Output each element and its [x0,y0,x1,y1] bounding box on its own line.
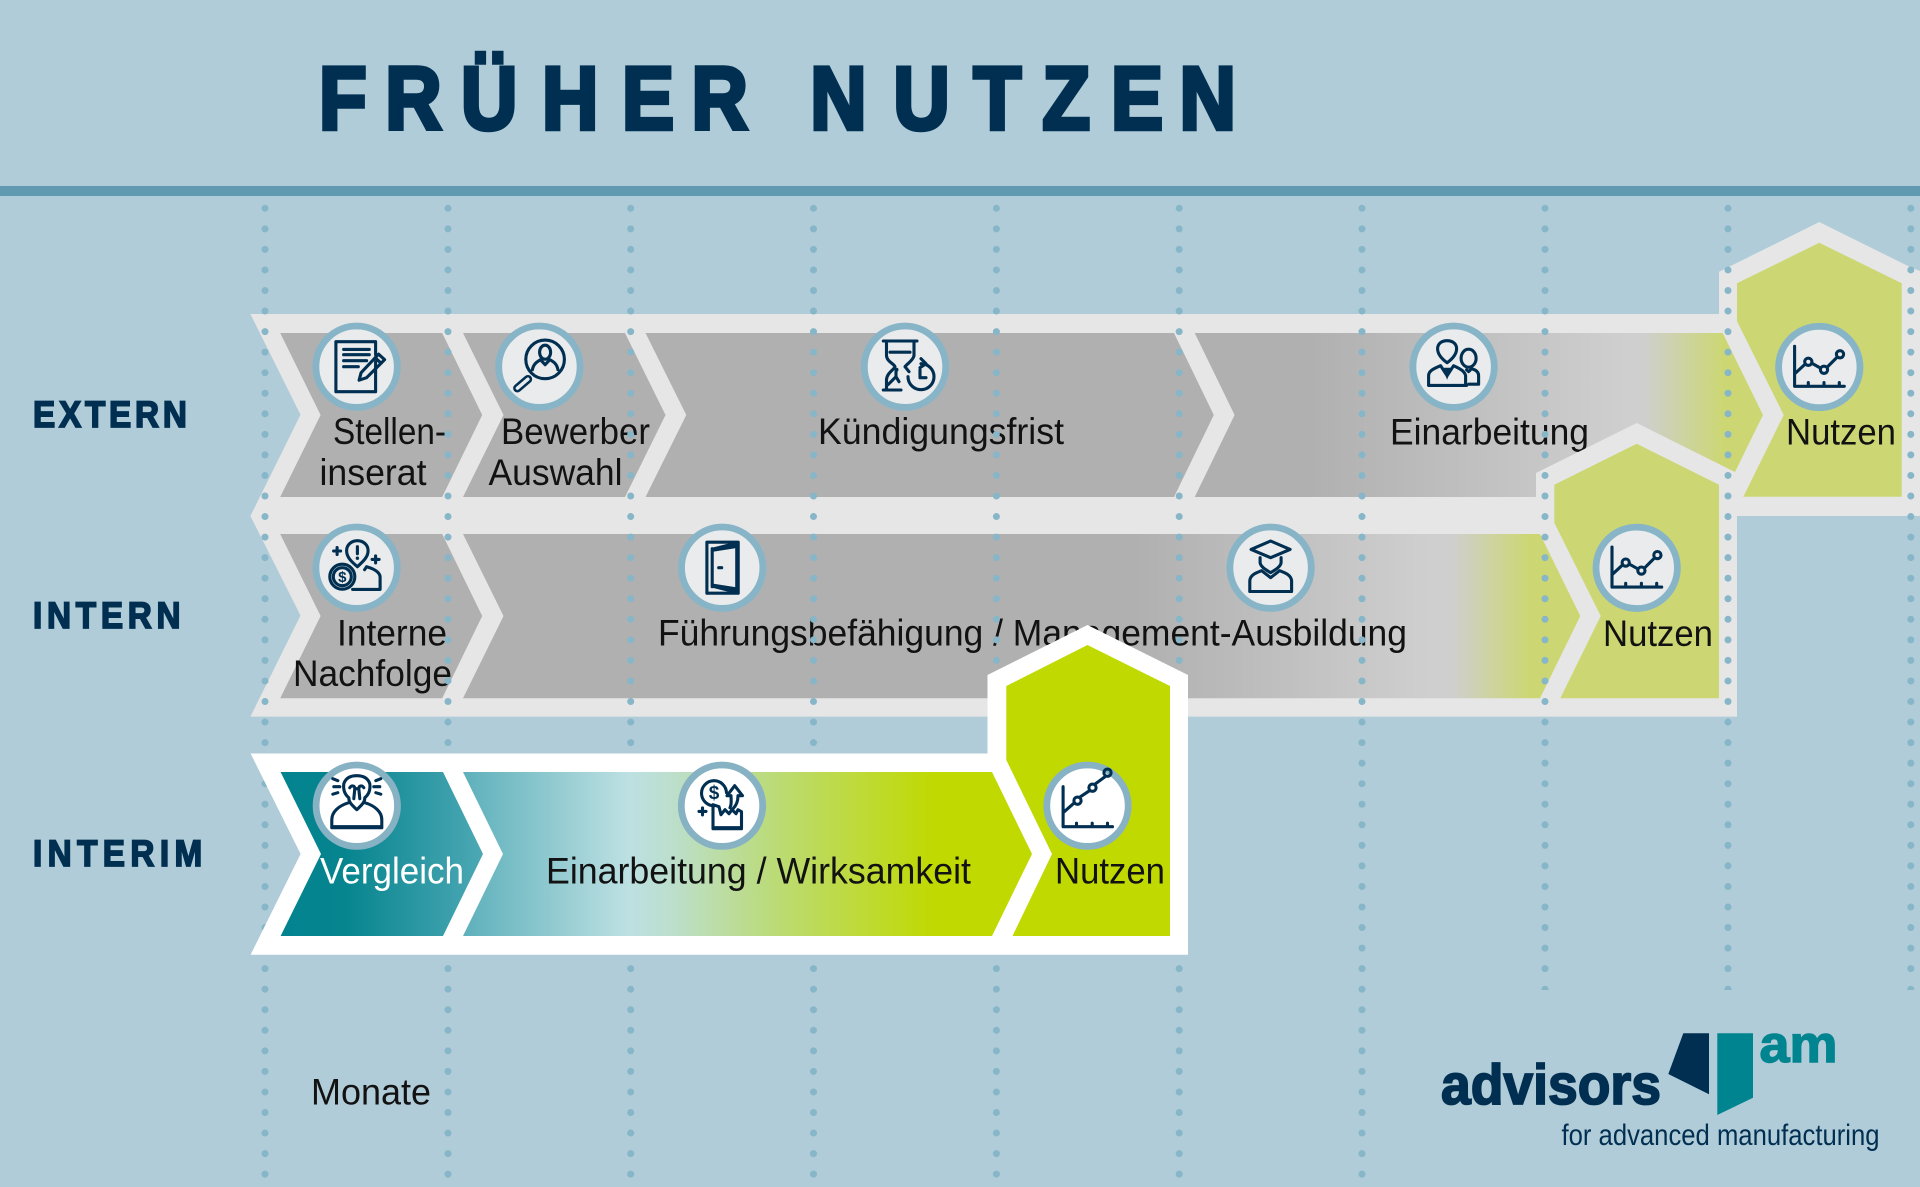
logo mark: teal shape [1717,1033,1753,1115]
header rule [0,186,1920,196]
intern frame [250,423,1737,717]
logo word: advisors: advisors [1441,1053,1661,1117]
icon: growth chart extern [1779,326,1860,408]
intern step: Interne Nachfolge [280,534,482,698]
text: Vergleich: Vergleich [320,849,464,891]
text: Stellen-: Stellen- [333,410,446,452]
interim frame [251,625,1188,955]
icon: growth chart intern [1596,527,1677,608]
icon: coin, idea and person [316,527,397,608]
logo: advisors am [1441,1016,1880,1152]
icon: magnifier with person [499,326,580,407]
extern frame [250,222,1920,516]
title: FRÜHERNUTZEN [319,48,1236,148]
extern step: Kündigungsfrist [646,333,1214,497]
interim step: Einarbeitung / Wirksamkeit [463,772,1032,936]
intern step: Nutzen [1554,444,1719,698]
text: inserat: inserat [320,451,427,493]
icon: coin, arrow and hand: $ [709,783,720,804]
row: interim [251,625,1188,955]
logo mark: dark shape [1668,1033,1709,1094]
text: Nutzen: Nutzen [1055,849,1165,891]
text: Kündigungsfrist: Kündigungsfrist [818,410,1065,452]
text: Nutzen: Nutzen [1786,410,1896,452]
row label: intern: INTERN [33,595,181,636]
icon: coin, arrow and hand [681,765,763,846]
intern step: Führungsbefähigung [463,534,1580,698]
row: intern [250,423,1737,717]
text: Bewerber: Bewerber [501,410,650,452]
text: Nutzen: Nutzen [1603,612,1713,654]
icon: hourglass with clock [864,326,946,407]
icon: manager and colleague [1413,326,1494,407]
row label: extern: EXTERN [33,394,187,435]
icon: person with light bulb [316,765,398,846]
text: Einarbeitung / Wirksamkeit: Einarbeitung / Wirksamkeit [546,849,972,891]
icon: door [682,527,763,608]
text: Interne: Interne [337,612,447,654]
row: extern [250,222,1920,516]
interim step: Vergleich [281,772,483,936]
month grid dots [265,208,1911,1176]
interim step: Nutzen [1006,645,1170,936]
text: Monate: Monate [311,1070,431,1112]
extern step: Nutzen [1737,243,1902,497]
text: Auswahl: Auswahl [488,451,622,493]
icon: coin, idea and person: $ [338,569,347,586]
text: Nachfolge: Nachfolge [293,652,452,694]
icon: rising chart [1047,765,1128,846]
row label: interim: INTERIM [33,833,202,874]
extern step: Einarbeitung [1195,333,1763,497]
extern step: Bewerber Auswahl [463,333,666,497]
text: Einarbeitung: Einarbeitung [1390,410,1589,452]
extern step: Stelleninserat [280,333,482,497]
icon: graduate [1230,527,1311,608]
logo word: am: am [1760,1016,1838,1074]
text: Führungsbefähigung / Management-Ausbildung: Führungsbefähigung / Management-Ausbildung [658,612,1407,654]
icon: document with pencil [316,326,397,407]
